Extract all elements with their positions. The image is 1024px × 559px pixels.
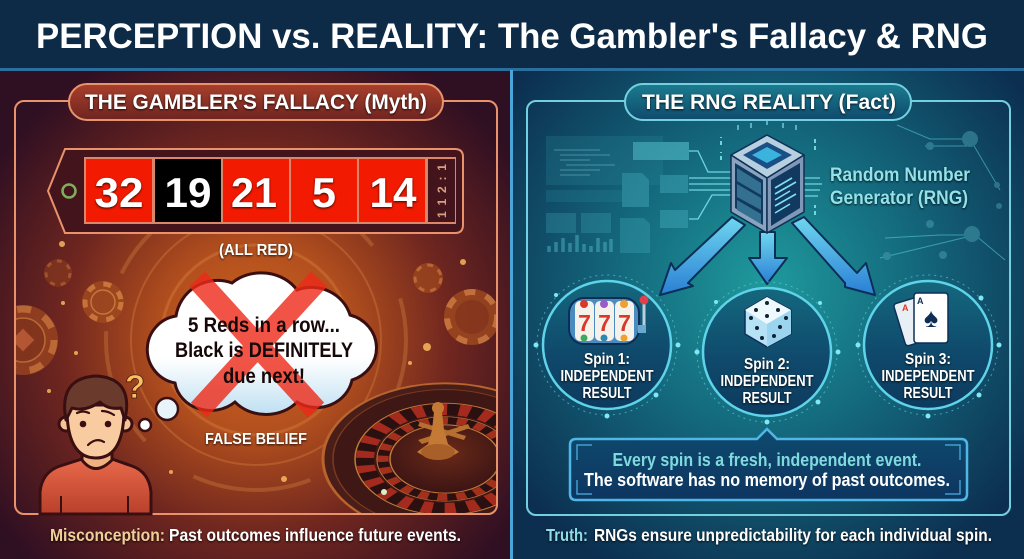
icon: slot machine: 7 (598, 310, 611, 336)
spin 3: RESULT (904, 385, 953, 402)
cell 5 (291, 159, 357, 222)
right background (513, 70, 1024, 559)
left background (0, 70, 511, 559)
circuit lines around server (689, 105, 822, 219)
spin 3: INDEPENDENT (882, 368, 975, 385)
cell 19: 19 (164, 169, 212, 216)
icon: playing cards (893, 293, 948, 346)
spin 2: RESULT (742, 390, 792, 407)
spin 1: INDEPENDENT (560, 368, 654, 385)
spin 2: INDEPENDENT (720, 373, 814, 390)
red cross (197, 279, 319, 410)
icon: slot machine: 7 (578, 310, 591, 336)
truth caption: Truth: (546, 525, 588, 545)
rng label: Random Number (830, 165, 971, 186)
code window (546, 136, 663, 185)
arrow right (792, 217, 875, 295)
icon: slot machine: 7 (618, 310, 631, 336)
heading pill (625, 84, 911, 120)
shirt (40, 459, 151, 514)
tech backdrop (546, 125, 1005, 260)
thought bubbles (139, 398, 178, 431)
icon: playing cards: A (902, 303, 909, 313)
rng label: Generator (RNG) (830, 188, 968, 209)
person (40, 376, 151, 514)
header band (0, 0, 1024, 71)
icon: slot machine (569, 296, 648, 344)
payout cell: 1 1 2 : 1 (435, 164, 449, 218)
cell 32 (86, 159, 152, 222)
false belief label: FALSE BELIEF (205, 431, 307, 448)
roulette number strip (48, 149, 463, 233)
center divider (510, 70, 513, 559)
network traces (880, 125, 1005, 260)
server cube (731, 135, 804, 233)
heading pill: THE GAMBLER'S FALLACY (Myth) (85, 91, 427, 114)
cell 19 (155, 159, 221, 222)
spin 2 (694, 282, 840, 424)
cloud text: Black is DEFINITELY (175, 339, 353, 362)
face (67, 405, 124, 458)
heading pill: THE RNG REALITY (Fact) (642, 91, 896, 114)
callout: Every spin is a fresh, independent event. (612, 450, 922, 470)
rng label (830, 165, 971, 209)
mini bars (549, 235, 611, 252)
icon: playing cards: A (917, 296, 924, 306)
arrow left (660, 217, 745, 295)
hair (65, 376, 127, 420)
payout cell (428, 159, 455, 222)
arrow middle (749, 232, 787, 284)
arrows (660, 217, 875, 295)
poker chips (0, 259, 500, 375)
neck (82, 445, 112, 468)
question mark: ? (125, 368, 145, 405)
folders (546, 142, 689, 253)
cell 14 (359, 159, 425, 222)
panel: myth (14, 83, 498, 546)
misconception caption: Past outcomes influence future events. (169, 525, 461, 545)
icon: dice (745, 297, 791, 347)
panel frame (15, 101, 497, 514)
wheel spindle (417, 402, 470, 460)
cell 32: 32 (94, 169, 144, 216)
cell 21: 21 (231, 169, 277, 216)
cell 14: 14 (370, 169, 417, 216)
spin 1: RESULT (582, 385, 632, 402)
facial features (77, 411, 114, 445)
spin 3 (856, 275, 1002, 418)
ears (59, 417, 73, 431)
cloud text: 5 Reds in a row... (188, 314, 340, 337)
cloud text: due next! (223, 365, 305, 388)
roulette wheel (322, 382, 496, 513)
panel frame (527, 101, 1010, 515)
title: PERCEPTION vs. REALITY: The Gambler's Fallacy & RNG (36, 17, 988, 56)
icon: playing cards: ♠ (924, 303, 938, 333)
misconception caption: Misconception: (50, 525, 165, 545)
zero marker (62, 184, 76, 198)
heading pill (69, 84, 443, 120)
spin 2: Spin 2: (744, 356, 790, 373)
casino backdrop (16, 234, 496, 513)
panel: fact (527, 84, 1010, 545)
spin 1 (534, 275, 680, 418)
spin 3: Spin 3: (905, 351, 951, 368)
cell 21 (223, 159, 289, 222)
thought cloud (147, 273, 376, 415)
spin 1: Spin 1: (584, 351, 630, 368)
cell 5: 5 (312, 169, 336, 216)
all red label: (ALL RED) (219, 242, 293, 259)
callout: The software has no memory of past outcomes. (584, 470, 950, 490)
cloud text (175, 314, 353, 388)
callout (570, 429, 967, 500)
wheel ball (381, 489, 387, 495)
